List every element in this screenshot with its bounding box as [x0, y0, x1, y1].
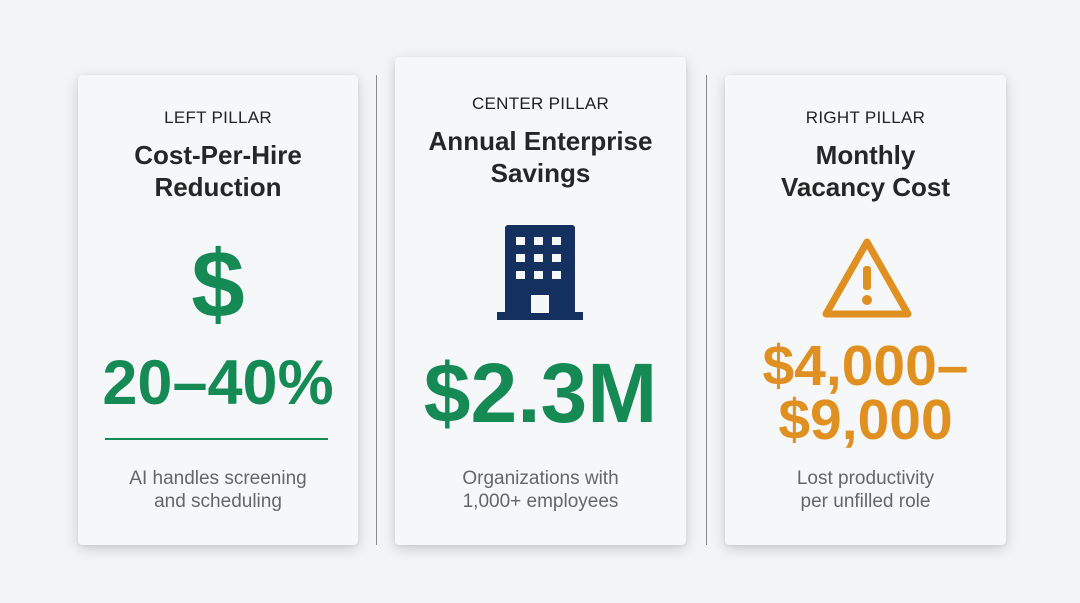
label: center pillar: CENTER PILLAR — [472, 94, 609, 113]
panel: left pillar — [78, 75, 358, 545]
description: left — [129, 468, 307, 512]
stat: 20-40%: 20–40% — [102, 348, 334, 418]
title: annual enterprise savings — [429, 126, 652, 188]
description: right: Lost productivity — [797, 468, 934, 489]
title: cost-per-hire reduction: Reduction — [154, 172, 282, 202]
title: annual enterprise savings: Annual Enterprise — [429, 126, 652, 156]
title: annual enterprise savings: Savings — [491, 158, 590, 188]
description: center — [462, 468, 619, 512]
stat: $4,000–$9,000: $9,000 — [778, 388, 953, 452]
icon: dollar sign: $ — [191, 231, 245, 338]
title: monthly vacancy cost: Monthly — [816, 140, 915, 170]
description: left: and scheduling — [154, 491, 282, 512]
label: right pillar: RIGHT PILLAR — [806, 108, 925, 127]
stat: $2.3M: $2.3M — [424, 346, 657, 440]
panel: right pillar — [725, 75, 1006, 545]
panel: center pillar — [395, 57, 686, 545]
stat: $4,000–$9,000 — [762, 334, 969, 452]
description: right — [797, 468, 934, 512]
description: center: 1,000+ employees — [463, 491, 618, 512]
stat: $4,000–$9,000: $4,000– — [762, 334, 969, 398]
description: center: Organizations with — [462, 468, 619, 489]
label: left pillar: LEFT PILLAR — [164, 108, 272, 127]
title: cost-per-hire reduction — [134, 140, 302, 202]
description: left: AI handles screening — [129, 468, 307, 489]
icon: building — [497, 225, 583, 320]
title: cost-per-hire reduction: Cost-Per-Hire — [134, 140, 302, 170]
description: right: per unfilled role — [801, 491, 930, 512]
title: monthly vacancy cost — [781, 140, 950, 202]
icon: warning triangle — [822, 238, 912, 318]
title: monthly vacancy cost: Vacancy Cost — [781, 172, 950, 202]
